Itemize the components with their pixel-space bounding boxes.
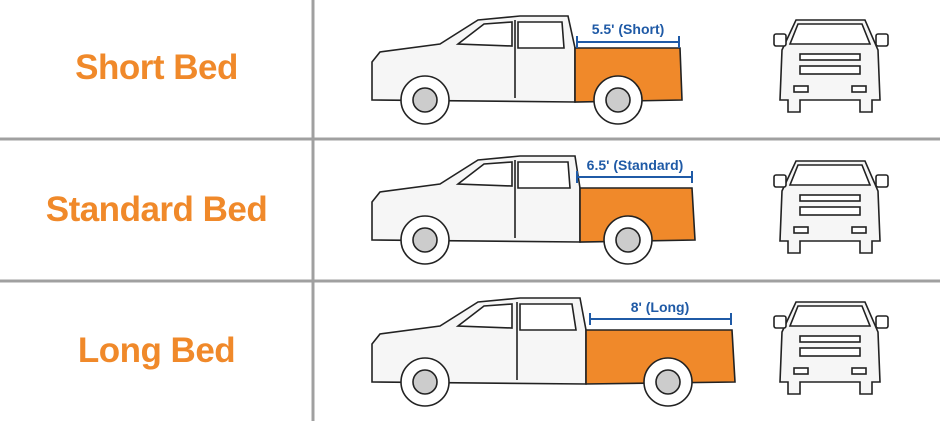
label: short bed: Short Bed [75, 48, 238, 87]
truck: long bed side view [372, 298, 735, 406]
label: standard bed: Standard Bed [46, 190, 267, 229]
dimension: 6.5' standard [577, 157, 692, 183]
dimension: 5.5' short [577, 21, 679, 48]
dimension: 5.5' short: 5.5' (Short) [592, 21, 664, 37]
truck: standard bed side view [372, 156, 695, 264]
front view truck 1 [774, 20, 888, 112]
front view truck 3 [774, 302, 888, 394]
front view truck 2 [774, 161, 888, 253]
label: long bed: Long Bed [78, 331, 235, 370]
truck: short bed side view [372, 16, 682, 124]
dimension: 6.5' standard: 6.5' (Standard) [587, 157, 683, 173]
dimension: 8' long: 8' (Long) [631, 299, 689, 315]
